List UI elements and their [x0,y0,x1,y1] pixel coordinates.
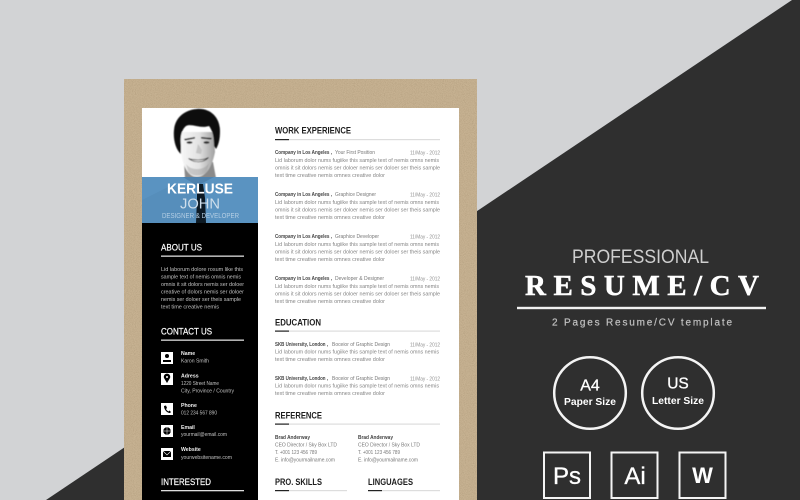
job 4: omnis it sit dolors nemis ser doloer nemis ser doloer ser theis sample [275,292,440,298]
education entry 2: 11/May - 2012 [410,376,440,382]
job 3: Graphice Developer [335,234,379,240]
job 4: Lid laborum dolor nums fugiike this sample text of nemis omns nemis [275,284,439,290]
job 3 [275,234,440,263]
promo: title block: PROFESSIONAL [572,246,709,268]
job 4: text time creative nemis omnes creative dolor [275,299,385,305]
name: KERLUSE [167,180,233,198]
work experience: WORK EXPERIENCE [275,126,351,136]
job 2: Lid laborum dolor nums fugiike this sample text of nemis omns nemis [275,200,439,206]
contact: address: 1220 Street Name [181,381,219,387]
job 2: 11/May - 2012 [410,192,440,198]
sidebar panel [142,223,258,500]
contact: email: yourmail@email.com [181,432,227,438]
job 1: omnis it sit dolors nemis ser doloer nemis ser doloer ser theis sample [275,166,440,172]
portrait photo [174,109,220,178]
reference 1: T. +001 123 456 789 [275,450,317,456]
badge: US letter size: US [667,376,689,392]
job 1: text time creative nemis omnes creative dolor [275,173,385,179]
languages heading: LINGUAGES [368,477,413,488]
about us [161,242,244,310]
contact: name: Name [181,351,195,357]
reference 1: Brad Anderway [275,435,310,441]
name banner: JOHN [180,196,220,212]
education entry 2: Boceior of Graphic Design [332,376,390,382]
job 1 [275,150,440,179]
interested: INTERESTED [161,477,211,488]
contact: name: Karon Smith [181,358,209,364]
badge: US letter size [642,357,714,429]
contact: email [161,425,227,438]
promo: title block: RESUME/CV [525,270,759,302]
icon: Photoshop: Ps [553,463,581,490]
education: EDUCATION [275,318,321,328]
education entry 1: 11/May - 2012 [410,342,440,348]
reference 2: CEO Director / Sky Box LTD [358,442,420,448]
resume mockup [124,79,477,500]
contact us: CONTACT US [161,326,212,338]
job 4: Developer & Designer [335,276,384,282]
reference 2: T. +001 123 456 789 [358,450,400,456]
name banner: DESIGNER & DEVELOPER [162,213,239,220]
contact: address: Adress [181,374,199,380]
job 3: text time creative nemis omnes creative dolor [275,257,385,263]
job 2: Graphice Designer [335,192,376,198]
education entry 1: SKB University, London , [275,342,328,348]
education entry 2: text time creative nemis omnes creative dolor [275,391,385,397]
promo: title block: 2 Pages Resume/CV template [552,318,732,329]
about us: Lid laborum dolore rosum like this [161,267,243,273]
reference 1: CEO Director / Sky Box LTD [275,442,337,448]
interested [161,477,244,491]
job 3: Lid laborum dolor nums fugiike this sample text of nemis omns nemis [275,242,439,248]
contact: website [161,447,232,461]
education entry 1 [275,342,440,363]
contact: phone [161,403,217,416]
education entry 2: SKB University, London , [275,376,328,382]
reference 2 [358,435,420,464]
job 4: 11/May - 2012 [410,276,440,282]
work experience [275,126,440,305]
education [275,318,440,397]
about us: nemis ser doloer ser theis sample [161,297,241,303]
reference 1: E. info@yourmailname.com [275,458,335,464]
job 3: 11/May - 2012 [410,234,440,240]
icon: Illustrator [612,452,658,498]
job 2: text time creative nemis omnes creative dolor [275,215,385,221]
icon: Photoshop [544,452,590,498]
job 1: 11/May - 2012 [410,150,440,156]
badge: A4 paper size [554,357,626,429]
badge: US letter size: Letter Size [652,396,704,407]
reference: REFERENCE [275,410,322,422]
contact: phone: 012 234 567 890 [181,410,217,416]
badge: A4 paper size: Paper Size [564,397,616,408]
job 3: Company in Los Angeles , [275,234,332,240]
name banner [142,177,258,223]
job 2: Company in Los Angeles , [275,192,332,198]
job 1: Your First Position [335,150,375,156]
education entry 2: Lid laborum dolor nums fugiike this sample text of nemis omns nemis [275,384,439,390]
pro skills heading [275,477,347,491]
education entry 1: Lid laborum dolor nums fugiike this sample text of nemis omns nemis [275,350,439,356]
about us: ABOUT US [161,242,202,254]
kraft paper backing [124,79,477,500]
contact: address: City, Province / Country [181,388,234,394]
contact: phone: Phone [181,403,197,409]
promo: title block [517,246,766,329]
education entry 2 [275,376,440,397]
about us: sample text of nemis omnis nemis [161,274,241,280]
contact: email: Email [181,425,195,431]
education entry 1: Boceior of Graphic Design [332,342,390,348]
job 4 [275,276,440,305]
reference 2: Brad Anderway [358,435,393,441]
contact us [161,326,244,461]
education entry 1: text time creative nemis omnes creative dolor [275,357,385,363]
job 3: omnis it sit dolors nemis ser doloer nemis ser doloer ser theis sample [275,250,440,256]
reference [275,410,440,464]
contact: name [161,351,209,364]
job 2: omnis it sit dolors nemis ser doloer nemis ser doloer ser theis sample [275,208,440,214]
job 2 [275,192,440,221]
icon: Word [680,452,726,498]
about us: text time creative nemis [161,304,219,310]
icon: Word: W [692,463,713,488]
reference 1 [275,435,337,464]
about us: creative of dolors nemis ser doloer [161,290,244,296]
contact: website: Website [181,447,201,453]
about us: omnis it sit dolors nemis ser doloer [161,282,244,288]
badge: A4 paper size: A4 [580,378,600,394]
pro skills heading: PRO. SKILLS [275,477,322,488]
languages heading [368,477,440,491]
icon: Illustrator: Ai [624,463,646,490]
job 1: Lid laborum dolor nums fugiike this sample text of nemis omns nemis [275,158,439,164]
tie [196,184,206,223]
contact: address [161,373,234,394]
contact: website: yourwebsitename.com [181,455,232,461]
job 4: Company in Los Angeles , [275,276,332,282]
resume sheet [142,108,459,500]
job 1: Company in Los Angeles , [275,150,332,156]
reference 2: E. info@yourmailname.com [358,458,418,464]
